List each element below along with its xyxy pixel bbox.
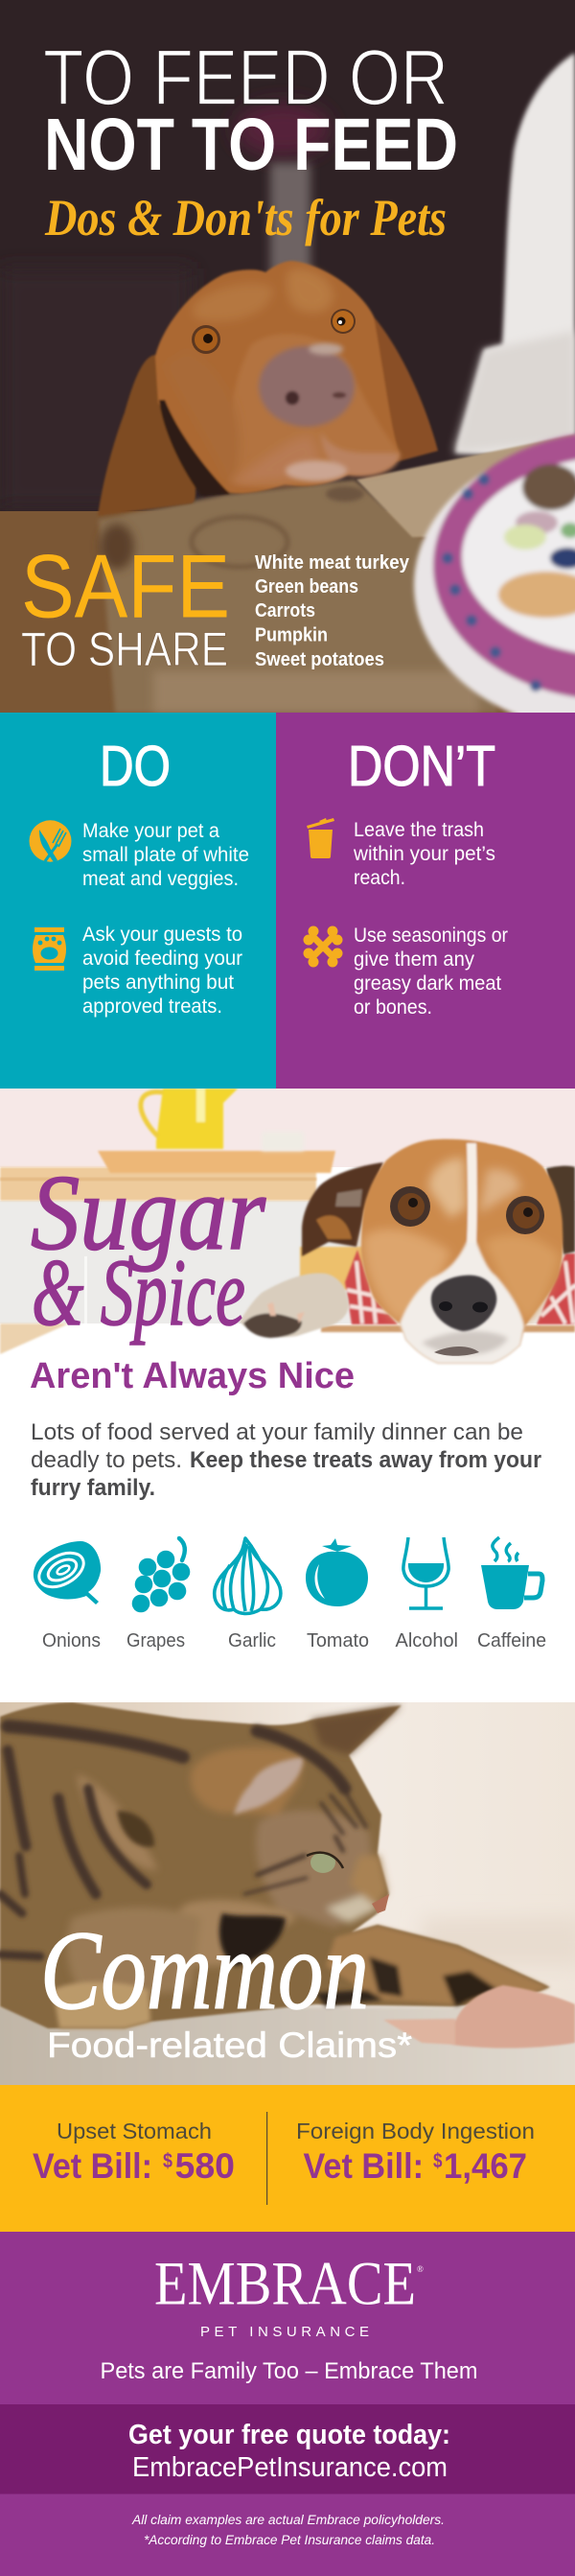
logo: embrace pet insurance: PET INSURANCE [200,2324,369,2340]
claim: foreign body ingestion: 1,467 [444,2146,527,2186]
photo: tabby cat [0,1702,575,2093]
cat arm and dark patches [53,1811,548,2028]
text: leave the trash: within your pet’s [353,843,495,865]
icon: caffeine cup [481,1537,542,1609]
label: alcohol: Alcohol [395,1630,458,1651]
paw [240,1273,349,1338]
icon: trash can [307,818,334,858]
safe foods list: Green beans [255,576,358,597]
claim: foreign body ingestion: $ [433,2150,443,2172]
icon: knife and fork [29,820,71,862]
text: ask your guests: avoid feeding your [82,948,242,970]
icon: crossed bones [303,926,343,967]
text: use seasonings: or bones. [354,996,432,1019]
claim: upset stomach: Upset Stomach [57,2119,212,2143]
icon: grapes [132,1538,190,1612]
text: use seasonings: give them any [354,948,474,971]
eyes [390,1186,544,1234]
nose [431,1276,496,1356]
logo: embrace pet insurance: EMBRACE [154,2250,416,2319]
text: use seasonings: Use seasonings or [354,925,508,947]
claim: upset stomach [33,2119,235,2186]
icon: onion [34,1541,101,1604]
panel: common claims [0,1702,575,2093]
claim: upset stomach: 580 [174,2146,235,2186]
photo: dog with bandana [0,1089,575,1366]
label: grapes: Grapes [126,1630,185,1651]
text: use seasonings [354,925,508,1019]
panel: embrace footer [0,2232,575,2576]
safe foods list: White meat turkey [255,552,410,574]
table [0,511,518,713]
title: to feed or not to feed: TO FEED OR [43,33,448,122]
cat eye and nose [307,1852,389,1913]
paragraph: deadly to pets. [31,1447,182,1473]
heading: safe to share [21,535,230,676]
text: leave the trash [353,819,495,889]
paragraph: Keep these treats away from your [190,1447,541,1473]
text: make a small plate: small plate of white [82,844,249,866]
call to action band: Get your free quote today: [128,2420,450,2450]
label: onions: Onions [42,1630,101,1651]
call to action band: EmbracePetInsurance.com [132,2452,448,2483]
tuna [383,1985,575,2049]
heading: common: Common [40,1908,369,2033]
text: ask your guests [82,924,242,1018]
ears [302,1162,575,1256]
cat body [0,1702,550,2028]
label: caffeine: Caffeine [477,1630,546,1651]
logo: embrace pet insurance [154,2250,424,2340]
heading: sugar and spice: & Spice [32,1239,245,1346]
text: ask your guests: approved treats. [82,995,222,1018]
text: leave the trash: reach. [354,867,405,889]
label: garlic: Garlic [228,1630,276,1651]
text: ask your guests: Ask your guests to [82,924,242,946]
tagline: Pets are Family Too – Embrace Them [100,2358,477,2384]
title: to feed or not to feed: NOT TO FEED [44,104,458,186]
panel: vet bills [0,2085,575,2232]
basket [300,1247,363,1290]
icon: tomato [306,1538,368,1606]
paragraph: furry family. [31,1475,155,1501]
text: make a small plate [82,820,249,890]
label: tomato: Tomato [307,1630,369,1651]
panel: do [0,713,276,1089]
footnotes: All claim examples are actual Embrace policyholders. [131,2513,445,2527]
panel: sugar and spice [0,1079,575,1702]
text: ask your guests: pets anything but [82,972,234,994]
text: leave the trash: Leave the trash [354,819,484,841]
heading: do: DO [100,735,171,798]
heading: safe to share: SAFE [21,535,230,637]
footnotes [131,2513,445,2547]
text: use seasonings: greasy dark meat [354,972,501,995]
plate [414,432,575,734]
table edge [321,1325,575,1332]
paragraph [31,1419,541,1501]
title: to feed or not to feed [43,33,458,186]
claim: foreign body ingestion: Vet Bill: [303,2146,424,2186]
icon: alcohol glass [403,1537,448,1608]
icon: treat jar [33,927,66,971]
cat markings [67,1705,402,2000]
heading: safe to share: TO SHARE [21,622,228,676]
footnotes: *According to Embrace Pet Insurance claims data. [144,2533,435,2547]
safe foods list: Sweet potatoes [255,649,384,670]
hero photo: dog at table [0,0,575,734]
text: make a small plate: meat and veggies. [82,868,239,890]
cat ear inner [234,1757,303,1815]
safe foods list: Pumpkin [255,625,328,646]
bandana [345,1250,575,1324]
safe foods list: Carrots [255,600,315,621]
text: make a small plate: Make your pet a [82,820,219,842]
dog head [98,261,438,516]
divider [266,2112,267,2205]
heading: don't: DON’T [348,735,495,798]
subheading: aren't always nice: Aren't Always Nice [30,1356,355,1396]
claim: upset stomach: $ [163,2150,172,2172]
logo: embrace pet insurance: ® [417,2264,424,2274]
claim: foreign body ingestion [296,2119,535,2186]
safe foods list [255,552,410,670]
paragraph: Lots of food served at your family dinner can be [31,1419,523,1445]
heading: sugar and spice [31,1154,265,1346]
claim: upset stomach: Vet Bill: [33,2146,152,2186]
subtitle: dos and don'ts: Dos & Don'ts for Pets [44,189,447,246]
subheading: food-related claims: Food-related Claims* [47,2026,412,2065]
head [361,1139,563,1364]
panel: hero [0,0,575,734]
panel: don't [276,713,575,1089]
call to action band [0,2404,575,2494]
heading: sugar and spice: Sugar [31,1154,265,1273]
yellow pitcher [141,1089,238,1149]
dog eyes [192,309,356,354]
cat stripes [0,1726,366,1956]
icon: garlic [215,1538,281,1613]
claim: foreign body ingestion: Foreign Body Ingestion [296,2119,535,2143]
